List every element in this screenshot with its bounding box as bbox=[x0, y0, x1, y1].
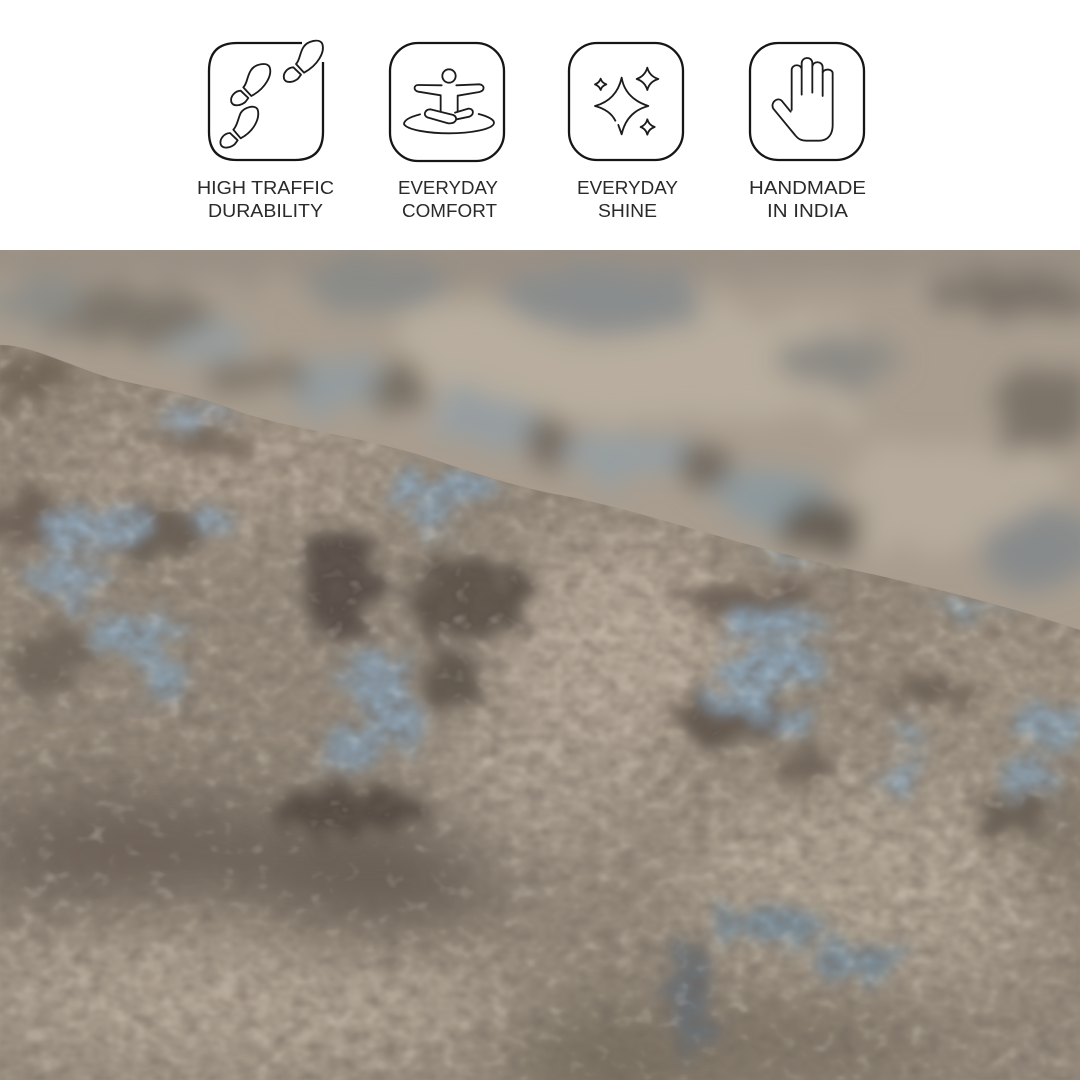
photo: blurred rug background bbox=[0, 230, 1080, 1080]
text: handmade in india label: IN INDIA bbox=[767, 200, 849, 221]
text: high traffic durability label: HIGH TRAFFIC bbox=[197, 177, 334, 198]
icon: everyday shine bbox=[569, 43, 683, 160]
text: everyday shine label bbox=[577, 177, 678, 221]
photo: rolled rug foreground bbox=[0, 330, 1080, 1080]
icon: high traffic durability bbox=[209, 41, 323, 160]
icon: handmade in india bbox=[750, 43, 864, 160]
icon: everyday comfort bbox=[390, 43, 504, 161]
text: everyday shine label: EVERYDAY bbox=[577, 177, 678, 198]
text: high traffic durability label: DURABILITY bbox=[208, 200, 323, 221]
text: everyday comfort label: COMFORT bbox=[402, 200, 497, 221]
text: everyday shine label: SHINE bbox=[598, 200, 657, 221]
text: everyday comfort label bbox=[398, 177, 498, 221]
text: handmade in india label: HANDMADE bbox=[749, 177, 866, 198]
text: everyday comfort label: EVERYDAY bbox=[398, 177, 498, 198]
text: handmade in india label bbox=[749, 177, 866, 221]
panel: feature icons bbox=[209, 41, 864, 161]
text: high traffic durability label bbox=[197, 177, 334, 221]
